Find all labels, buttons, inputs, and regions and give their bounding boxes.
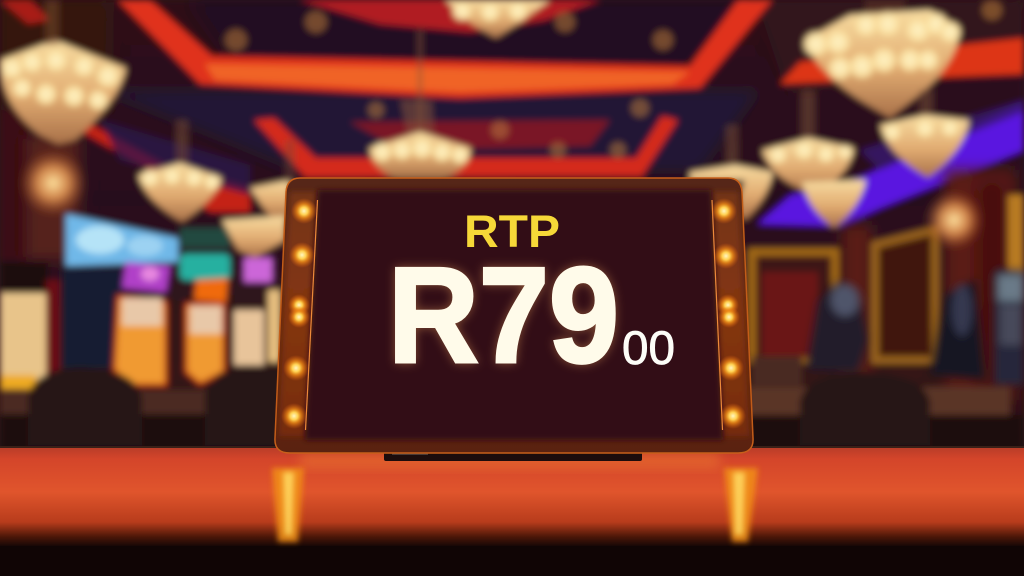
right wall columns, gold frames and lamp: [752, 170, 1024, 400]
chandelier, left middle: [138, 120, 222, 222]
chandelier, top right: [802, 0, 962, 118]
board body: [275, 178, 753, 453]
price cents: 00: [622, 321, 675, 374]
left slot machines: [0, 214, 280, 390]
sign board: [275, 178, 753, 453]
chandeliers behind sign, left: [222, 140, 290, 258]
right LED lights: [711, 198, 746, 429]
chandelier, centre: [369, 30, 471, 178]
chandelier, right of sign: [690, 125, 773, 220]
casino chairs: [28, 367, 930, 445]
inner light lines: [306, 200, 318, 430]
ceiling panel: [0, 0, 1024, 170]
right LED strip: [713, 192, 749, 436]
sign glow and reflections on table: [272, 454, 758, 542]
price glow: R79: [388, 239, 619, 391]
ceiling neon bands: [0, 0, 1024, 212]
purple neon band: [100, 100, 1024, 226]
price value: R79: [388, 239, 619, 391]
dark display panel: [305, 190, 723, 440]
chandelier, lower right group: [762, 90, 969, 228]
left LED strip: [279, 192, 316, 436]
ceiling spotlights: [225, 0, 1002, 158]
sign stand: [384, 452, 642, 461]
chandelier, far left: [0, 0, 126, 144]
right slot machines: [806, 270, 1024, 385]
left wall column with lamp: [0, 110, 87, 260]
left LED lights: [281, 198, 317, 429]
chandelier, top centre: [445, 0, 550, 38]
RTP label: RTP: [464, 206, 560, 257]
red table top: [0, 446, 1024, 576]
counter tables: [0, 356, 1024, 450]
